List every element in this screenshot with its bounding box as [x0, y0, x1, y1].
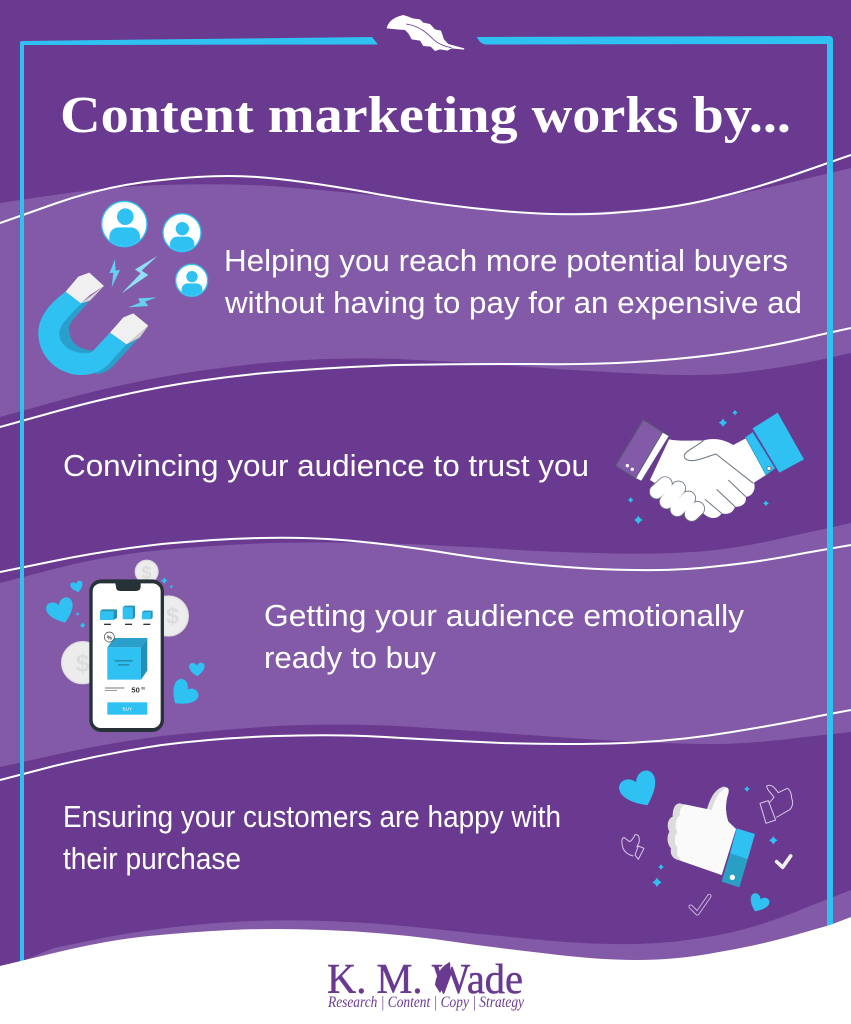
- icon: phone shop: [44, 560, 205, 732]
- text: trust: Convincing your audience to trust you: [63, 448, 589, 483]
- light band 1: [0, 168, 851, 417]
- text: emotionally ready: Getting your audience emotionally: [264, 598, 745, 633]
- light band 2: [0, 523, 851, 767]
- icon: phone shop: 00: [141, 686, 145, 690]
- text: emotionally ready: ready to buy: [264, 640, 437, 675]
- text: happy customers: Ensuring your customers are happy with: [63, 799, 561, 834]
- icon: phone shop: %: [107, 635, 112, 641]
- text: emotionally ready: [264, 598, 745, 675]
- icon: feather: [387, 15, 464, 51]
- white wave lines: [0, 155, 851, 780]
- logo quill: [435, 962, 450, 993]
- text: reach more buyers: [224, 243, 802, 320]
- icon: phone shop: BUY: [123, 706, 132, 711]
- logo: K. M. Wade: [327, 957, 523, 1003]
- bottom white wave: [0, 917, 851, 1024]
- icon: thumbs up: [616, 768, 793, 915]
- title: Content marketing works by...: [60, 87, 791, 144]
- icon: phone shop: 50: [131, 685, 140, 694]
- text: reach more buyers: without having to pay for an expensive ad: [224, 285, 802, 320]
- icon: handshake: [616, 410, 804, 524]
- icon: phone shop: $: [76, 650, 90, 677]
- text: reach more buyers: Helping you reach more potential buyers: [224, 243, 788, 278]
- text: happy customers: their purchase: [63, 841, 241, 876]
- logo: Research | Content | Copy | Strategy: [327, 994, 524, 1011]
- icon: magnet attracting people: [38, 201, 208, 375]
- icon: phone shop: $: [166, 603, 179, 629]
- text: happy customers: [63, 799, 561, 876]
- icon: phone shop: $: [142, 563, 152, 583]
- bottom light wave: [0, 890, 851, 1024]
